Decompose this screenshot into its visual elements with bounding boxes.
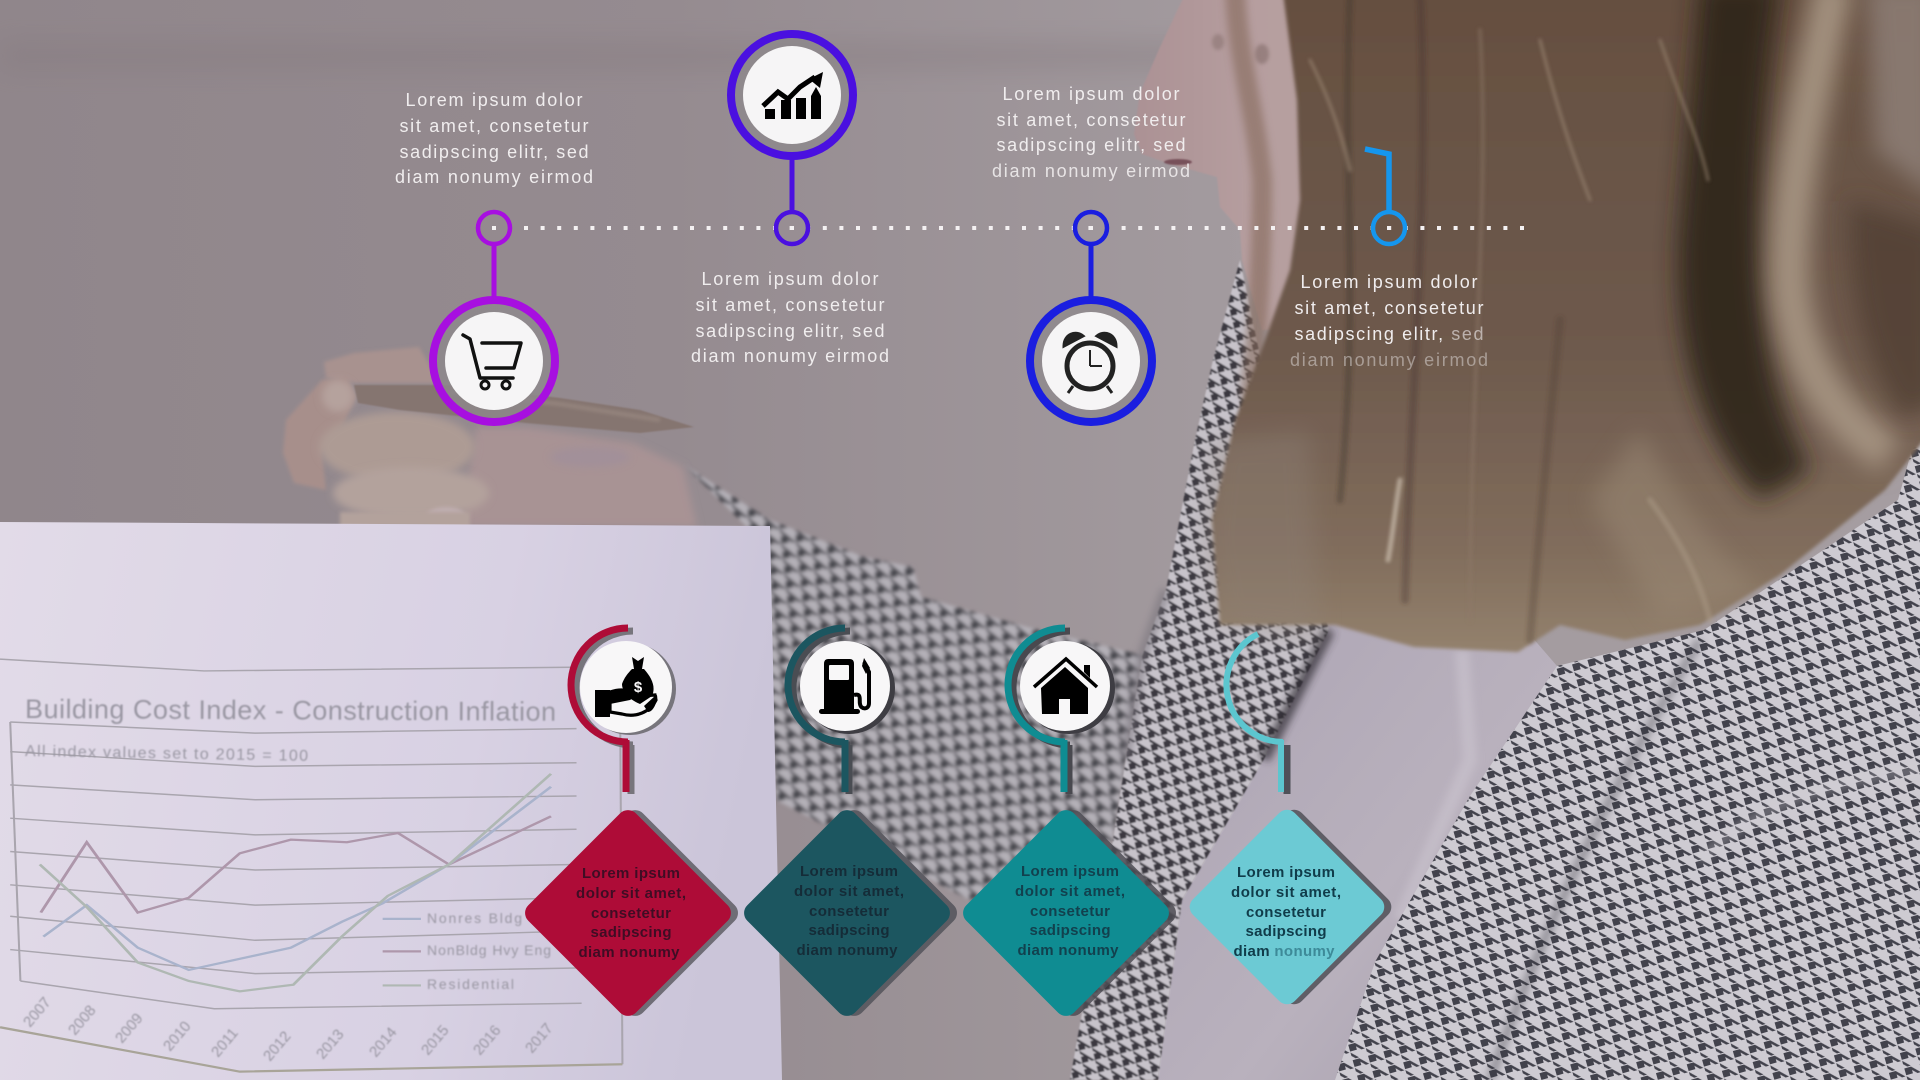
diamond: [521, 802, 743, 1024]
dotted timeline: [524, 226, 1527, 230]
diamond text: diam nonumy: [796, 942, 898, 959]
card 2: dark teal diamond: [740, 628, 962, 1024]
caption: sadipscing elitr, sed: [696, 321, 884, 341]
milestone 3: alarm clock: [992, 84, 1190, 422]
diamond text: [794, 863, 904, 959]
diamond text: sadipscing: [808, 922, 890, 939]
chart axis years: 2012: [260, 1028, 295, 1065]
card 3: teal diamond: [959, 628, 1181, 1024]
chart axis years: 2007: [20, 994, 55, 1031]
caption: diam nonumy eirmod: [691, 346, 889, 366]
icon badge: growth chart: [731, 34, 853, 156]
diamond text: diam nonumy: [578, 944, 680, 961]
chart axis years: 2017: [522, 1020, 557, 1057]
pin with arc: [571, 628, 633, 794]
hair: [1205, 0, 1920, 652]
chart legend: Residential: [427, 976, 514, 992]
card 1: crimson diamond: [521, 628, 743, 1024]
diamond text: Lorem ipsum: [800, 863, 898, 880]
diamond text: diam nonumy: [1234, 943, 1335, 960]
caption: sadipscing elitr, sed: [996, 135, 1186, 155]
diamond text: [1015, 863, 1125, 959]
diamond text: dolor sit amet,: [1015, 883, 1125, 900]
chart axis years: 2008: [65, 1002, 100, 1039]
milestone 1: cart: [395, 90, 593, 422]
milestone 4: partially revealed: [1290, 149, 1488, 370]
caption: Lorem ipsum dolor: [406, 90, 582, 110]
face and neck: [1134, 0, 1340, 330]
pin with arc: [1008, 628, 1070, 794]
icon: fuel pump: [800, 641, 895, 734]
caption: [691, 269, 889, 366]
caption: [1290, 272, 1488, 370]
chart axis years: 2015: [418, 1022, 453, 1059]
chart axis years: 2016: [470, 1022, 505, 1059]
pin with arc: [788, 628, 850, 794]
diamond text: dolor sit amet,: [576, 885, 686, 902]
paper with line chart: [0, 522, 782, 1080]
diamond text: consetetur: [1246, 904, 1326, 921]
card 4: light teal diamond: [1185, 634, 1396, 1012]
diamond text: consetetur: [591, 905, 671, 922]
pin with arc: [1226, 634, 1287, 794]
chart subtitle: All index values set to 2015 = 100: [25, 743, 308, 765]
diamond text: sadipscing: [590, 924, 672, 941]
icon: money bag in hand: $: [634, 679, 643, 696]
chart axis years: 2010: [160, 1018, 195, 1055]
connector and node: [478, 212, 510, 297]
jacket lapel: [1070, 260, 1329, 1080]
milestone 2: growth chart: [691, 34, 889, 366]
connector and node: [1365, 149, 1405, 244]
caption: sit amet, consetetur: [1294, 298, 1484, 318]
diamond text: consetetur: [1030, 903, 1110, 920]
diamond text: Lorem ipsum: [582, 865, 680, 882]
caption: sit amet, consetetur: [400, 116, 588, 136]
caption: diam nonumy eirmod: [395, 167, 593, 187]
icon: house: [1020, 641, 1115, 734]
caption: Lorem ipsum dolor: [1300, 272, 1478, 292]
caption: Lorem ipsum dolor: [702, 269, 878, 289]
chart title: Building Cost Index - Construction Inflation: [25, 694, 556, 727]
diamond: [740, 802, 962, 1024]
chart lines: [0, 659, 622, 1072]
caption: sit amet, consetetur: [996, 110, 1186, 130]
chart axis years: 2009: [112, 1010, 147, 1047]
diamond text: sadipscing: [1246, 923, 1326, 940]
caption: Lorem ipsum dolor: [1002, 84, 1180, 104]
hand holding pen: [283, 347, 697, 527]
chart legend: NonBldg Hvy Eng: [427, 942, 551, 958]
jacket body: [1335, 420, 1920, 1080]
chart axis years: 2011: [208, 1025, 242, 1061]
icon: money bag in hand: [580, 641, 676, 735]
diamond text: consetetur: [809, 903, 889, 920]
caption: diam nonumy eirmod: [1290, 350, 1488, 370]
caption: sadipscing elitr, sed: [400, 142, 588, 162]
diamond text: dolor sit amet,: [794, 883, 904, 900]
diamond text: sadipscing: [1030, 922, 1110, 939]
caption: sit amet, consetetur: [696, 295, 884, 315]
connector and node: [1075, 212, 1107, 297]
jacket sleeve: [684, 465, 1142, 900]
diamond text: Lorem ipsum: [1237, 864, 1335, 881]
chart legend: [427, 910, 551, 992]
chart axis years: [20, 994, 557, 1065]
caption: sadipscing elitr, sed: [1294, 324, 1484, 344]
diamond text: [576, 865, 686, 961]
icon badge: alarm clock: [1030, 300, 1152, 422]
diamond text: Lorem ipsum: [1021, 863, 1119, 880]
caption: [992, 84, 1190, 181]
diamond text: dolor sit amet,: [1231, 884, 1341, 901]
connector and node: [776, 157, 808, 244]
diamond: [959, 802, 1181, 1024]
chart axis years: 2013: [313, 1026, 348, 1063]
caption: diam nonumy eirmod: [992, 161, 1190, 181]
icon badge: shopping cart: [433, 300, 555, 422]
diamond: [1185, 802, 1396, 1012]
diamond text: diam nonumy: [1018, 942, 1119, 959]
diamond text: [1231, 864, 1341, 960]
chart legend: Nonres Bldg: [427, 910, 522, 926]
caption: [395, 90, 593, 187]
blouse: [1158, 560, 1557, 1080]
chart axis years: 2014: [366, 1024, 401, 1061]
